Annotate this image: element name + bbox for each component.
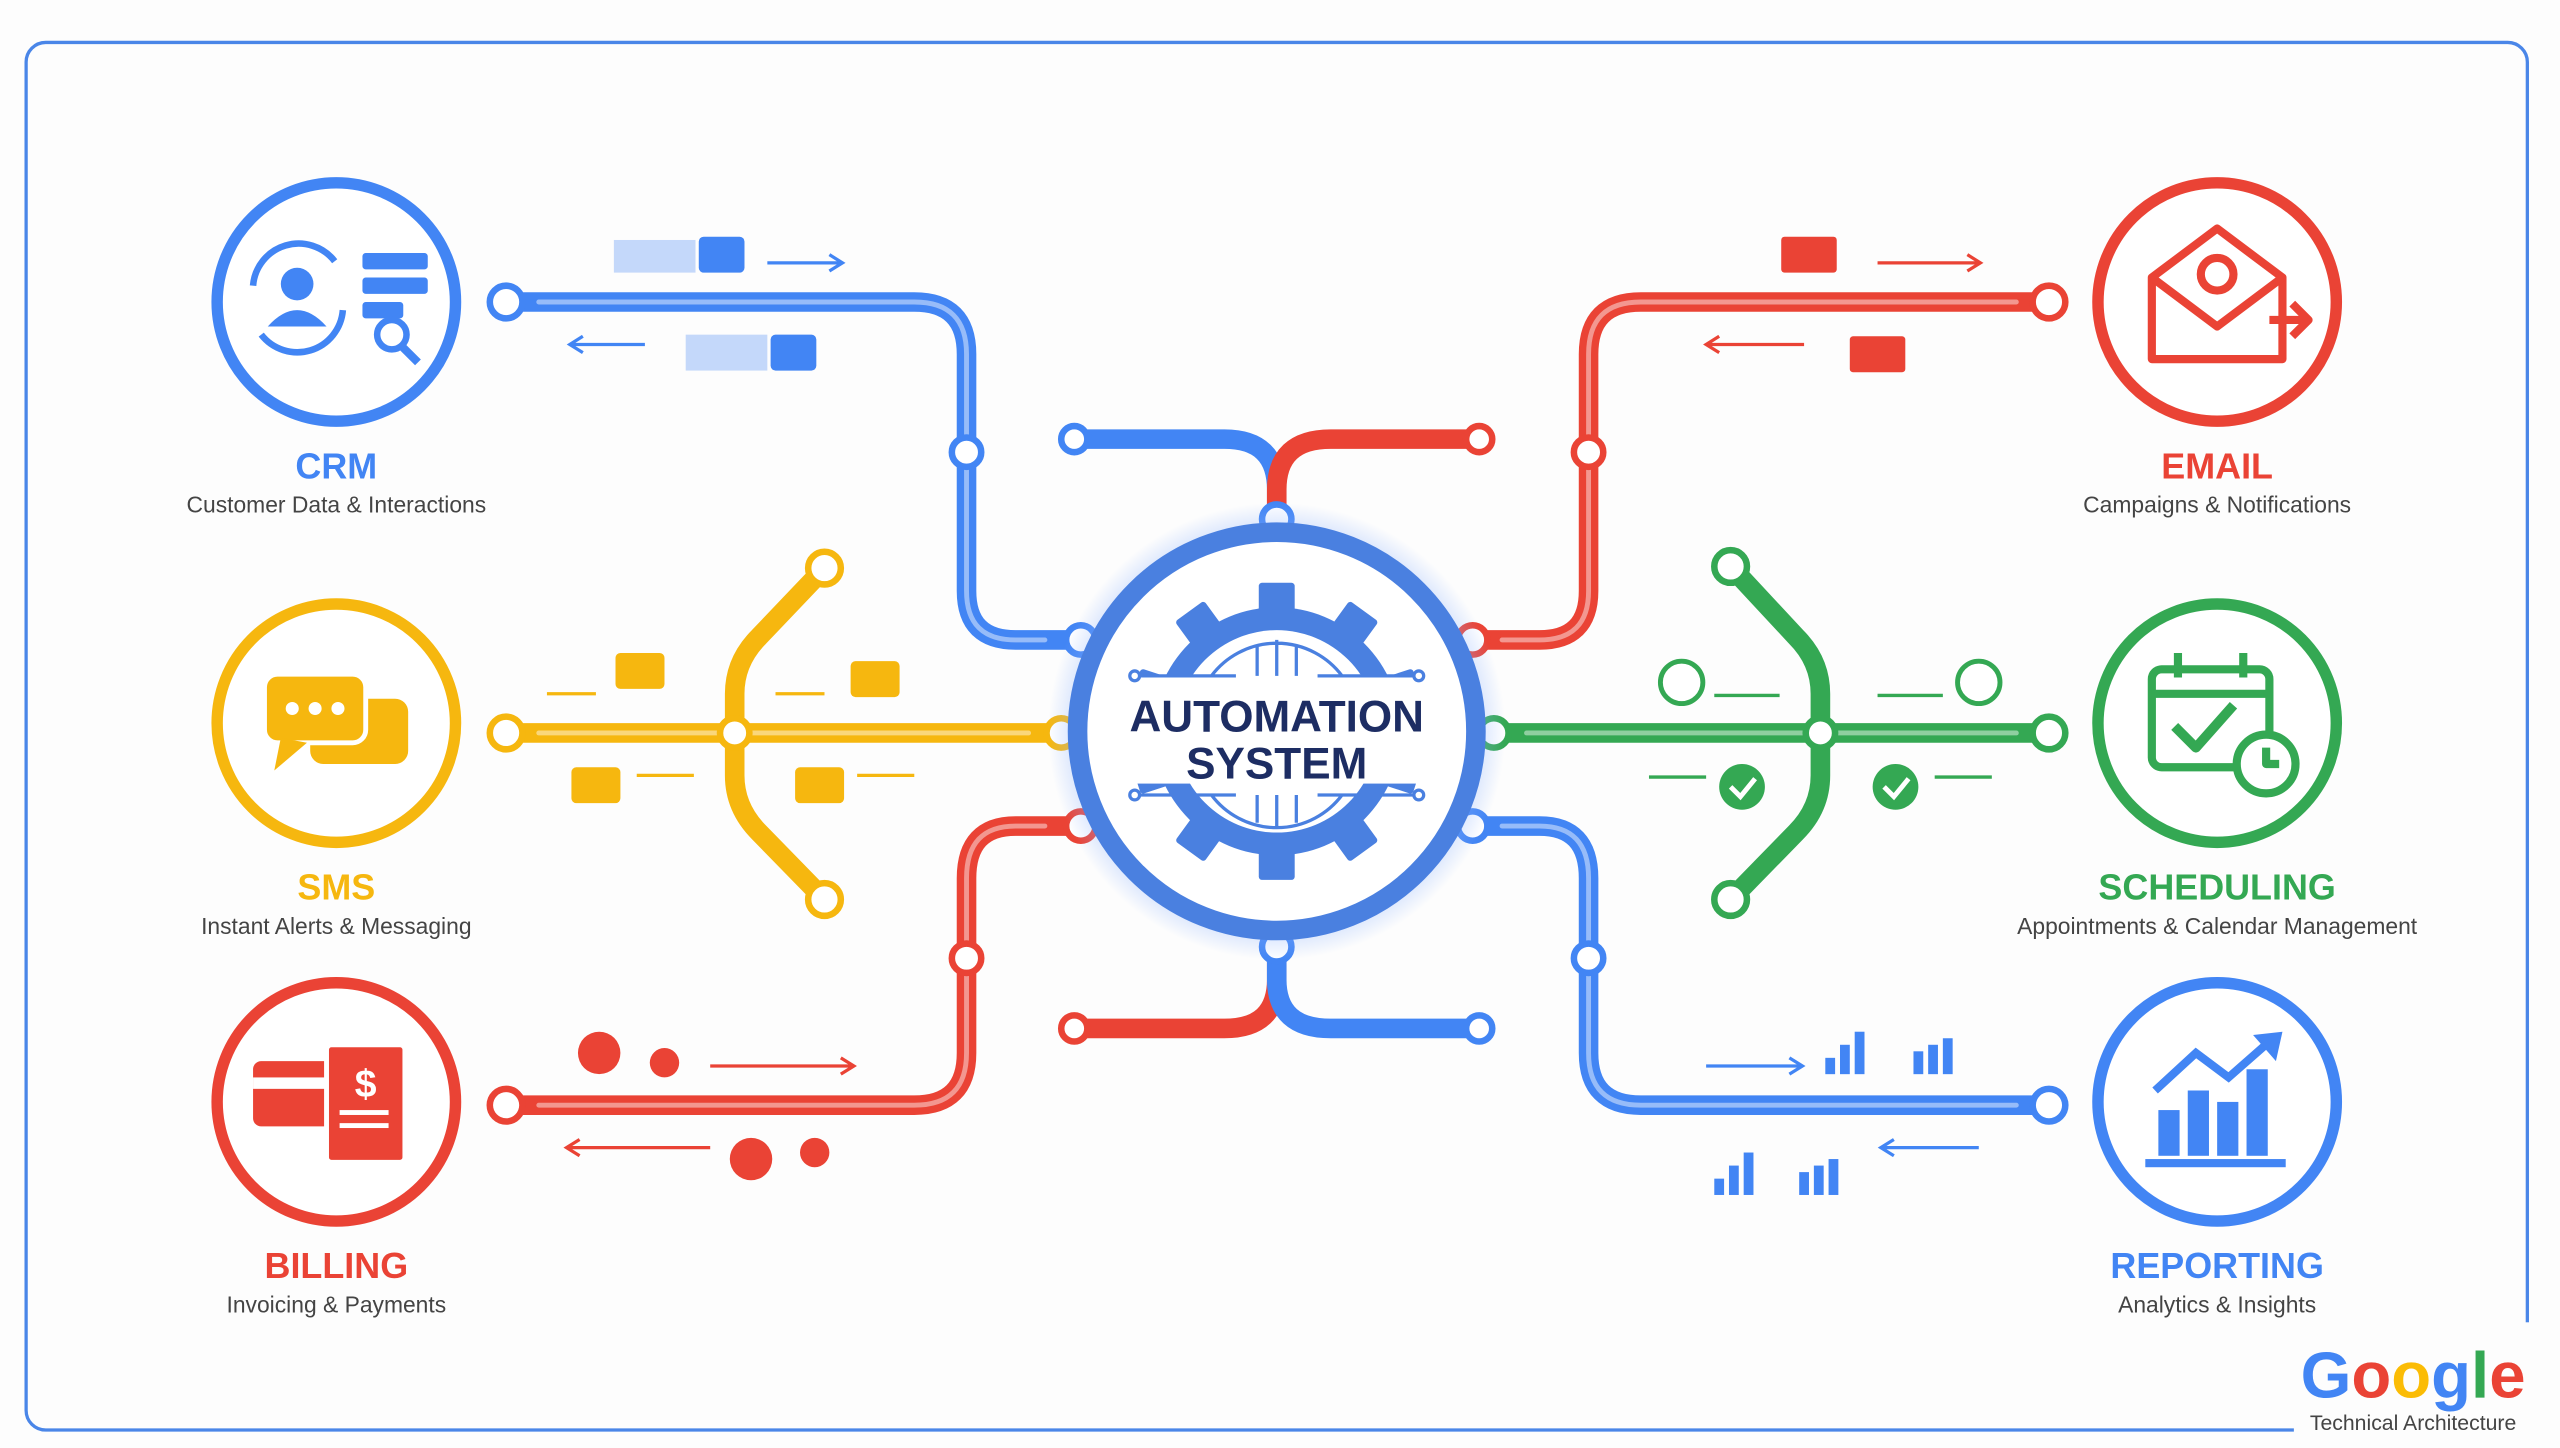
panel: SMS — [201, 604, 472, 939]
panel: Scheduling: SCHEDULING — [2098, 866, 2336, 907]
icon: billing — [253, 1045, 405, 1162]
panel: Billing — [217, 983, 456, 1318]
central hub — [1048, 503, 1505, 960]
panel: SMS: Instant Alerts & Messaging — [201, 913, 472, 939]
icon: billing: $ — [355, 1063, 377, 1106]
panel: Email: Campaigns & Notifications — [2083, 492, 2351, 518]
icon: chart — [2145, 1032, 2286, 1167]
panel: Scheduling — [2017, 604, 2418, 939]
floating icons: scheduling — [1649, 661, 2000, 810]
panel: CRM: Customer Data & Interactions — [186, 492, 486, 518]
panel: Email: EMAIL — [2161, 445, 2273, 486]
Google logo — [2294, 1322, 2539, 1445]
floating icons: CRM data — [570, 237, 842, 371]
floating icons: reporting charts — [1706, 1032, 1979, 1195]
Google logo: Google — [2301, 1338, 2526, 1411]
panel: Email — [2083, 183, 2351, 518]
panel: Reporting: Analytics & Insights — [2118, 1292, 2316, 1318]
panel: Scheduling: Appointments & Calendar Management — [2017, 913, 2418, 939]
icon: chat bubbles — [264, 674, 408, 771]
floating icons: emails — [1706, 237, 1980, 372]
connector lines — [506, 302, 2049, 1105]
panel: CRM: CRM — [295, 445, 377, 486]
panel: SMS: SMS — [297, 866, 375, 907]
gear — [1113, 583, 1440, 880]
hub title: SYSTEM — [1186, 740, 1367, 789]
floating icons: billing coins — [567, 1032, 854, 1180]
panel: Billing: BILLING — [265, 1245, 408, 1286]
floating icons: SMS — [547, 653, 914, 803]
panel: Reporting — [2098, 983, 2336, 1318]
Google logo: Technical Architecture — [2310, 1412, 2516, 1435]
line nodes — [490, 286, 2065, 1122]
panel: CRM — [186, 183, 486, 518]
panel: Billing: Invoicing & Payments — [226, 1292, 446, 1318]
icon: calendar — [2152, 653, 2296, 793]
icon: CRM — [253, 244, 428, 362]
icon: envelope — [2152, 229, 2309, 359]
panel: Reporting: REPORTING — [2110, 1245, 2324, 1286]
hub title: AUTOMATION — [1129, 692, 1424, 741]
hub title — [1129, 692, 1424, 789]
